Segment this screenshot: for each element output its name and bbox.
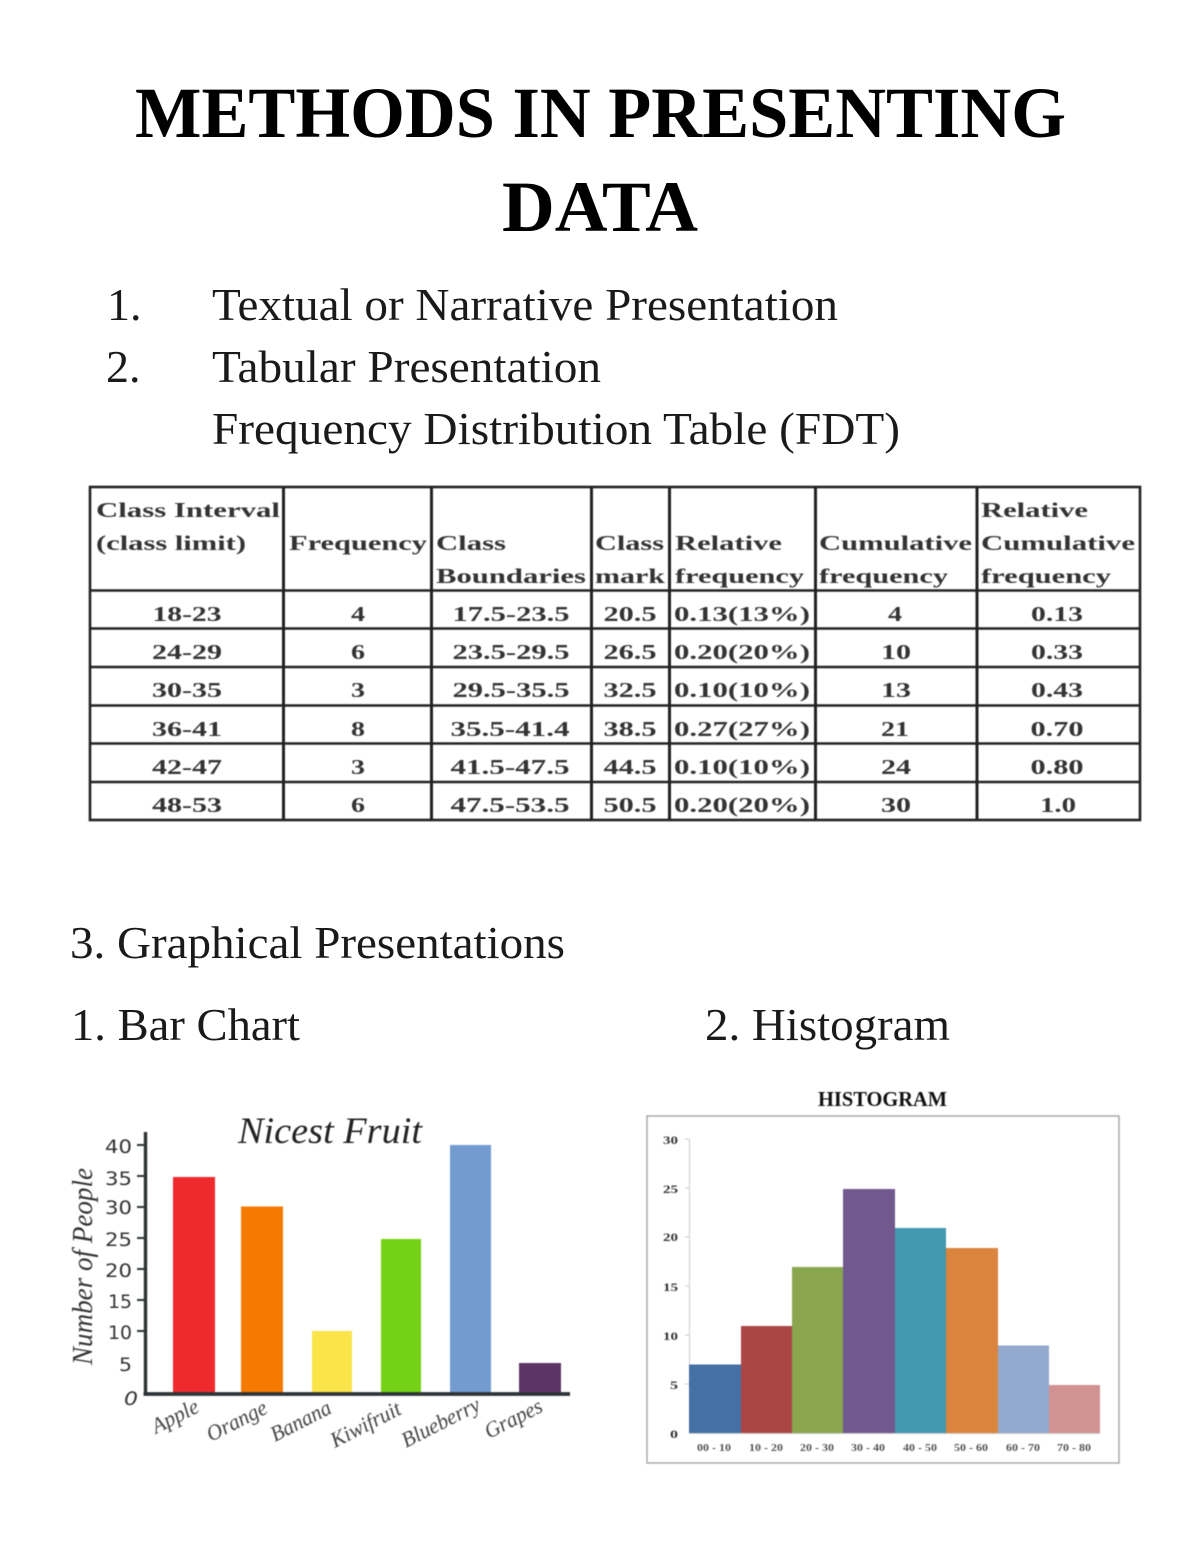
table header row: Relative xyxy=(981,498,1088,522)
table row 48-53: 30 xyxy=(881,793,911,817)
table row 36-41: 0.70 xyxy=(1030,717,1084,741)
y axis labels: 25 xyxy=(105,1229,132,1251)
heading: histogram: 2. Histogram xyxy=(705,999,950,1050)
table row 30-35: 0.10(10%) xyxy=(674,678,810,702)
table row 30-35 xyxy=(152,678,1083,702)
axes and ticks xyxy=(137,1132,570,1395)
histogram y axis labels: 5 xyxy=(670,1378,678,1392)
chart frame xyxy=(647,1116,1119,1463)
y axis labels: 35 xyxy=(105,1168,132,1190)
x axis labels: Banana xyxy=(266,1395,335,1446)
title: METHODS IN PRESENTING xyxy=(135,73,1066,153)
histogram y axis labels: 25 xyxy=(663,1182,678,1196)
table row 36-41 xyxy=(152,717,1084,741)
x axis labels: Kiwifruit xyxy=(325,1395,406,1453)
table header row: mark xyxy=(595,564,665,588)
table header row: (class limit) xyxy=(96,531,246,555)
y axis labels: 30 xyxy=(105,1197,132,1219)
y axis labels: 15 xyxy=(108,1291,132,1313)
table header row xyxy=(96,498,1135,588)
numbered list: presentation methods: 1. xyxy=(107,279,142,330)
table header row: frequency xyxy=(675,564,805,588)
table header row: Cumulative xyxy=(981,531,1135,555)
numbered list: presentation methods: Textual or Narrative Presentation xyxy=(212,279,838,330)
histogram x axis labels: 40 - 50 xyxy=(903,1443,937,1454)
table grid xyxy=(90,487,1140,820)
histogram x axis labels: 70 - 80 xyxy=(1057,1443,1091,1454)
table row 24-29: 24-29 xyxy=(152,640,222,664)
histogram y axis labels: 0 xyxy=(670,1427,678,1441)
table row 24-29: 23.5-29.5 xyxy=(452,640,570,664)
histogram y axis labels: 30 xyxy=(663,1133,678,1147)
y axis labels: 5 xyxy=(119,1354,132,1376)
histogram y axis labels: 15 xyxy=(663,1280,678,1294)
table row 24-29: 0.20(20%) xyxy=(674,640,810,664)
table row 36-41: 38.5 xyxy=(604,717,656,741)
table row 48-53 xyxy=(152,793,1076,817)
table row 42-47: 42-47 xyxy=(152,755,222,779)
table row 42-47: 0.10(10%) xyxy=(674,755,810,779)
histogram x axis labels: 20 - 30 xyxy=(800,1443,834,1454)
histogram title: HISTOGRAM xyxy=(818,1087,947,1111)
table header row: Class xyxy=(595,531,664,555)
table header row: frequency xyxy=(819,564,949,588)
table header row: Frequency xyxy=(289,531,428,555)
numbered list: presentation methods: Frequency Distribution Table (FDT) xyxy=(212,403,900,454)
table row 42-47: 3 xyxy=(351,755,365,779)
table row 30-35: 29.5-35.5 xyxy=(452,678,570,702)
histogram x axis labels: 50 - 60 xyxy=(954,1443,988,1454)
table row 48-53: 1.0 xyxy=(1040,793,1076,817)
heading: bar chart: 1. Bar Chart xyxy=(71,999,300,1050)
table row 36-41: 21 xyxy=(881,717,909,741)
table row 18-23: 18-23 xyxy=(152,602,222,626)
table row 24-29: 0.33 xyxy=(1031,640,1083,664)
table row 18-23: 0.13(13%) xyxy=(674,602,810,626)
x axis labels: Blueberry xyxy=(397,1391,484,1452)
chart title: Nicest Fruit xyxy=(237,1111,424,1152)
histogram y axis labels: 20 xyxy=(663,1230,678,1244)
heading: graphical presentations: 3. Graphical Presentations xyxy=(70,917,565,968)
y axis labels xyxy=(105,1136,138,1410)
table row 24-29: 26.5 xyxy=(604,640,656,664)
histogram x axis labels: 10 - 20 xyxy=(749,1443,783,1454)
table row 42-47: 41.5-47.5 xyxy=(450,755,570,779)
table row 24-29: 10 xyxy=(881,640,911,664)
bars xyxy=(173,1145,561,1393)
table row 18-23: 17.5-23.5 xyxy=(452,602,570,626)
bar chart: nicest fruit xyxy=(68,1111,570,1453)
table header row: Boundaries xyxy=(436,564,586,588)
frequency distribution table xyxy=(90,487,1140,820)
table row 30-35: 30-35 xyxy=(152,678,222,702)
table row 42-47: 0.80 xyxy=(1030,755,1084,779)
axes xyxy=(685,1139,1100,1434)
histogram bars xyxy=(689,1189,1100,1433)
histogram y axis labels: 10 xyxy=(663,1329,678,1343)
table row 30-35: 0.43 xyxy=(1031,678,1083,702)
histogram x axis labels: 00 - 10 xyxy=(697,1443,731,1454)
numbered list: presentation methods: Tabular Presentation xyxy=(212,341,601,392)
histogram x axis labels: 30 - 40 xyxy=(851,1443,885,1454)
x axis labels: Orange xyxy=(202,1395,271,1446)
table row 30-35: 3 xyxy=(351,678,365,702)
numbered list: presentation methods xyxy=(106,279,900,454)
y axis labels: 10 xyxy=(108,1322,132,1344)
title xyxy=(135,73,1066,247)
table row 36-41: 8 xyxy=(351,717,365,741)
table row 36-41: 0.27(27%) xyxy=(674,717,810,741)
table row 18-23: 20.5 xyxy=(604,602,656,626)
table header row: Relative xyxy=(675,531,782,555)
table row 48-53: 47.5-53.5 xyxy=(450,793,570,817)
table row 18-23 xyxy=(152,602,1083,626)
x axis labels xyxy=(145,1391,547,1453)
table row 42-47 xyxy=(152,755,1084,779)
table row 42-47: 44.5 xyxy=(604,755,656,779)
table row 18-23: 0.13 xyxy=(1031,602,1083,626)
table header row: Cumulative xyxy=(819,531,972,555)
histogram x axis labels xyxy=(697,1443,1091,1454)
table row 42-47: 24 xyxy=(881,755,912,779)
table row 48-53: 48-53 xyxy=(152,793,222,817)
numbered list: presentation methods: 2. xyxy=(106,341,140,392)
table header row: Class xyxy=(436,531,506,555)
table row 30-35: 13 xyxy=(881,678,911,702)
histogram x axis labels: 60 - 70 xyxy=(1006,1443,1040,1454)
table row 18-23: 4 xyxy=(351,602,366,626)
table row 36-41: 35.5-41.4 xyxy=(450,717,570,741)
table row 48-53: 0.20(20%) xyxy=(674,793,810,817)
histogram chart xyxy=(647,1087,1119,1463)
table row 36-41: 36-41 xyxy=(152,717,222,741)
x axis labels: Grapes xyxy=(480,1393,547,1443)
y axis labels: 0 xyxy=(124,1388,138,1410)
title: DATA xyxy=(502,167,698,247)
x axis labels: Apple xyxy=(145,1393,203,1439)
y axis labels: 40 xyxy=(105,1136,132,1158)
y axis labels: 20 xyxy=(105,1260,132,1282)
histogram y axis labels xyxy=(663,1133,678,1441)
table row 24-29 xyxy=(152,640,1083,664)
table header row: frequency xyxy=(981,564,1112,588)
table row 30-35: 32.5 xyxy=(604,678,656,702)
y axis title: Number of People xyxy=(68,1168,99,1366)
table row 18-23: 4 xyxy=(888,602,903,626)
table header row: Class Interval xyxy=(96,498,280,522)
table row 48-53: 50.5 xyxy=(604,793,656,817)
table row 48-53: 6 xyxy=(351,793,365,817)
table row 24-29: 6 xyxy=(351,640,365,664)
